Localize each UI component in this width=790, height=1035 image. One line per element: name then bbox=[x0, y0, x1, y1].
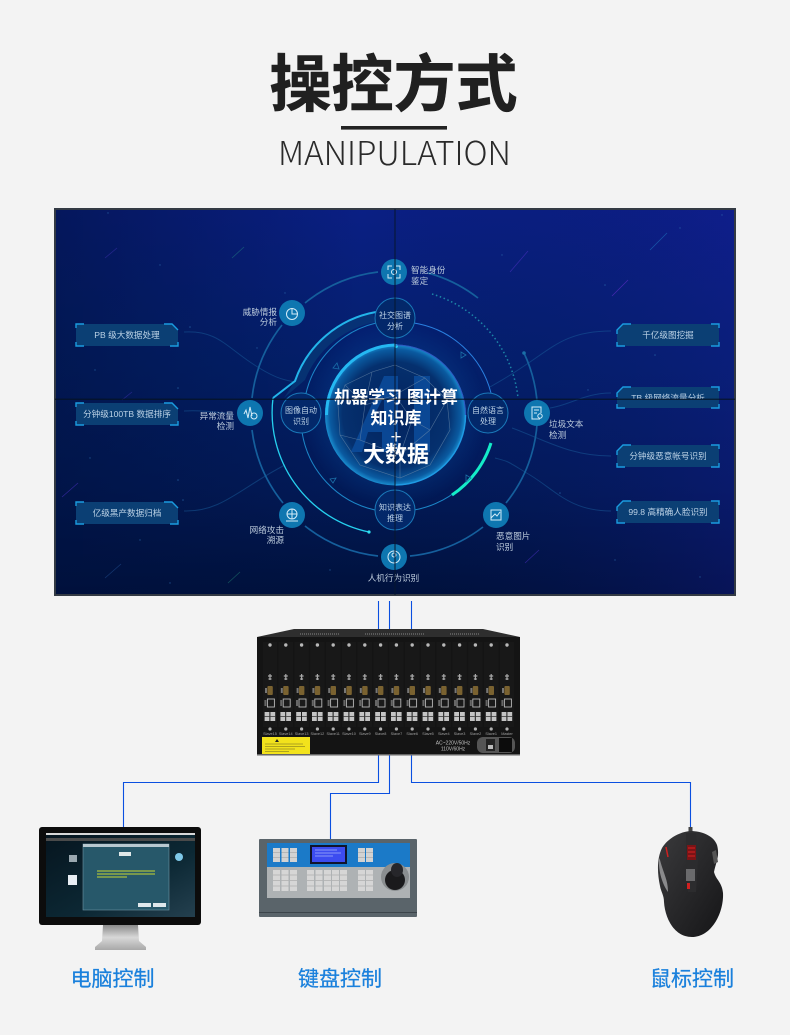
keys bbox=[273, 848, 373, 891]
node: social graph analysis: 社交图谱 bbox=[379, 310, 411, 320]
slot labels: Slave15 bbox=[263, 732, 277, 736]
tag: archive bbox=[76, 502, 178, 524]
node: knowledge representation bbox=[375, 490, 415, 530]
wall frame bbox=[54, 208, 736, 596]
caption: keyboard control: 键盘控制 bbox=[298, 968, 382, 991]
node: automatic image recognition: 识别 bbox=[293, 417, 309, 426]
label: traffic anomaly: 检测 bbox=[217, 420, 234, 431]
tag: traffic analysis: TB 级网络流量分析 bbox=[631, 392, 705, 403]
label: threat intelligence: 分析 bbox=[260, 316, 277, 327]
node: natural language processing: 自然语言 bbox=[472, 405, 504, 415]
node: natural language processing: 处理 bbox=[480, 416, 496, 426]
connector curves bbox=[184, 331, 611, 511]
subtitle: MANIPULATION bbox=[278, 127, 511, 175]
tag: face recognition: 99.8 高精确人脸识别 bbox=[628, 506, 708, 517]
label: network trace: 溯源 bbox=[267, 534, 284, 545]
central heading: big data: 大数据 bbox=[363, 442, 429, 467]
slot labels: Slave3 bbox=[454, 732, 465, 736]
AI letters bbox=[351, 376, 430, 452]
power rating bbox=[436, 740, 471, 752]
desktop icons bbox=[68, 853, 183, 885]
tag: 100TB sort: 分钟级100TB 数据排序 bbox=[83, 408, 171, 419]
label: behaviour recognition: 人机行为识别 bbox=[368, 572, 419, 583]
label: spam text: 垃圾文本 bbox=[549, 418, 584, 429]
wall background bbox=[56, 210, 734, 594]
network mesh bbox=[338, 365, 450, 478]
starfield and streaks bbox=[62, 212, 723, 584]
slot labels: Slave1 bbox=[485, 732, 497, 736]
slot labels: Slave5 bbox=[422, 732, 434, 736]
central disc bbox=[304, 323, 488, 507]
icon node: identity bbox=[381, 259, 407, 285]
LCD screen bbox=[310, 845, 347, 864]
node: social graph analysis: 分析 bbox=[387, 321, 403, 331]
label: network trace: 网络攻击 bbox=[250, 524, 284, 535]
tag: PB data processing bbox=[76, 324, 178, 346]
tag: face recognition bbox=[617, 501, 719, 523]
central heading: plus: + bbox=[390, 427, 402, 448]
device: mouse bbox=[658, 827, 723, 937]
label: identity: 智能身份 bbox=[411, 264, 446, 275]
tag: traffic analysis bbox=[617, 387, 719, 408]
central heading: machine learning, graph computing: 机器学习 图计算 bbox=[334, 387, 458, 407]
slot labels: Slave7 bbox=[391, 732, 402, 736]
label: threat intelligence: 威胁情报 bbox=[243, 306, 277, 317]
caption: computer control: 电脑控制 bbox=[70, 968, 154, 991]
node: knowledge representation: 推理 bbox=[387, 513, 403, 523]
node: knowledge representation: 知识表达 bbox=[379, 502, 411, 512]
slot labels: Slave6 bbox=[406, 732, 418, 736]
icon node: traffic anomaly bbox=[237, 400, 263, 426]
title: 操控方式 bbox=[269, 34, 518, 124]
wall seams bbox=[55, 209, 735, 595]
icon node: bad image bbox=[483, 502, 509, 528]
title underline bbox=[341, 126, 447, 130]
tag: PB data processing: PB 级大数据处理 bbox=[94, 329, 160, 340]
icon node: behaviour recognition bbox=[381, 544, 407, 570]
slot labels: Slave10 bbox=[342, 732, 356, 736]
label: spam text bbox=[549, 418, 584, 440]
power socket bbox=[477, 737, 515, 753]
slot labels: Slave14 bbox=[279, 732, 293, 736]
icon node: spam text bbox=[524, 400, 550, 426]
label: traffic anomaly: 异常流量 bbox=[200, 410, 234, 421]
label: threat intelligence bbox=[243, 306, 277, 327]
dialog window bbox=[83, 844, 169, 910]
slot labels: Master bbox=[501, 732, 514, 736]
slot labels: Slave4 bbox=[438, 732, 450, 736]
icon node: threat intelligence bbox=[279, 300, 305, 326]
label: bad image: 恶意图片 bbox=[496, 530, 530, 541]
slot labels: Slave2 bbox=[470, 732, 481, 736]
label: network trace bbox=[250, 524, 284, 545]
slot labels: Slave13 bbox=[295, 732, 308, 736]
node: social graph analysis bbox=[375, 298, 415, 338]
bright inner arcs bbox=[272, 312, 491, 534]
tag: malicious accounts bbox=[617, 445, 719, 467]
power rating: AC~220V/50Hz bbox=[436, 740, 471, 746]
slot labels: Slave11 bbox=[326, 732, 340, 736]
tag: graph mining: 千亿级图挖掘 bbox=[642, 329, 694, 340]
device: monitor bbox=[39, 827, 201, 950]
node: automatic image recognition: 图像自动 bbox=[285, 405, 317, 415]
joystick bbox=[381, 863, 409, 891]
tag: malicious accounts: 分钟级恶意帐号识别 bbox=[629, 450, 707, 461]
label: bad image bbox=[496, 530, 530, 552]
device: matrix chassis bbox=[257, 629, 520, 756]
central heading: knowledge base: 知识库 bbox=[370, 409, 422, 428]
label: spam text: 检测 bbox=[549, 429, 566, 440]
monitor stand bbox=[95, 925, 146, 950]
slot labels: Slave12 bbox=[311, 732, 324, 736]
power rating: 110V/60Hz bbox=[441, 746, 466, 752]
slot labels: Slave9 bbox=[359, 732, 371, 736]
slot labels bbox=[263, 732, 514, 736]
icon node: network trace bbox=[279, 502, 305, 528]
label: identity: 鉴定 bbox=[411, 275, 429, 286]
label: bad image: 识别 bbox=[496, 542, 513, 552]
warning label bbox=[262, 737, 310, 754]
node: automatic image recognition bbox=[281, 393, 321, 433]
tag: archive: 亿级黑产数据归档 bbox=[93, 507, 161, 518]
node: natural language processing bbox=[468, 393, 508, 433]
connection lines bbox=[124, 601, 690, 839]
caption: mouse control: 鼠标控制 bbox=[650, 968, 734, 991]
module slots bbox=[263, 642, 514, 731]
panel: video wall bbox=[54, 208, 736, 596]
tag: graph mining bbox=[617, 324, 719, 346]
label: identity bbox=[411, 264, 446, 286]
slot labels: Slave8 bbox=[375, 732, 386, 736]
device: control keyboard bbox=[259, 839, 417, 917]
label: traffic anomaly bbox=[200, 410, 234, 431]
outer ring segments bbox=[252, 272, 537, 556]
tag: 100TB sort bbox=[76, 403, 178, 425]
